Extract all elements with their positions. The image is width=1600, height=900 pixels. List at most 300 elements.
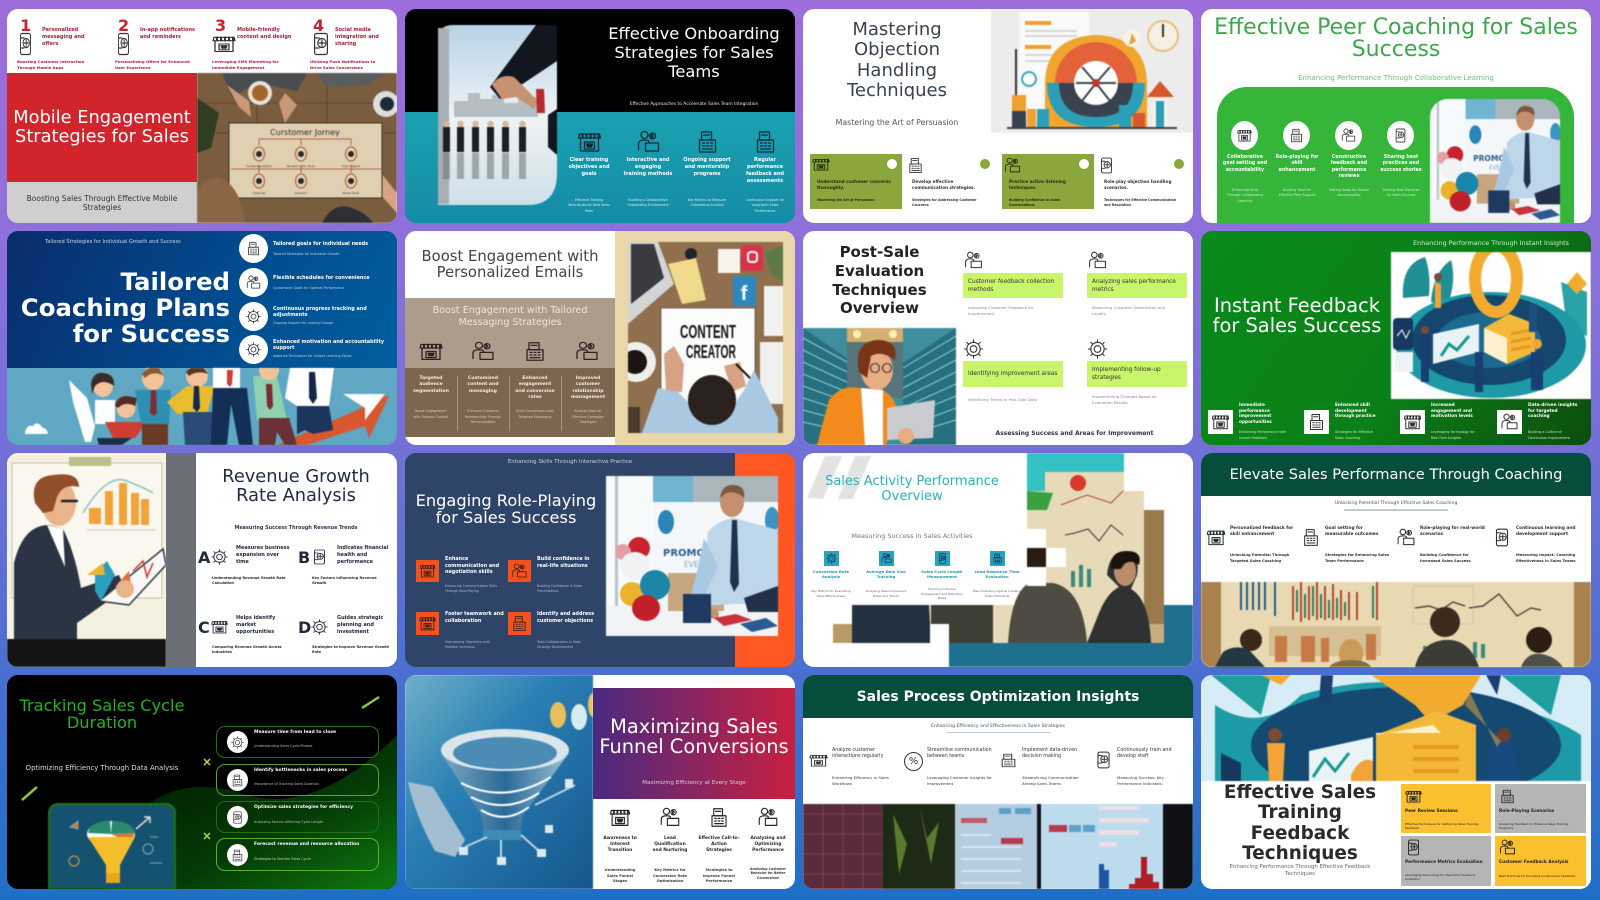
photo: customer journey board on table: Curstomer Jorney (270, 128, 340, 137)
item: foster teamwork: collaboration (445, 618, 481, 624)
photo: hand placing figure on businessmen (437, 24, 558, 206)
icon row (419, 342, 598, 361)
item: goal setting: Strategies for Enhancing Sales (1325, 553, 1389, 557)
item: constructive feedback: reviews (1339, 174, 1359, 179)
item: continuous learning: development support (1516, 532, 1568, 537)
item: identify objections: Team Collaboration in Sales (537, 640, 581, 644)
column: enhanced engagement: and conversion (515, 389, 555, 394)
item: streamline communication: % (909, 756, 918, 767)
panel: Sales Process Optimization Insights (803, 675, 1193, 889)
item: constructive feedback: performance (1332, 168, 1366, 173)
item: continuous learning: Continuous learning and (1516, 526, 1575, 531)
item: interactive training methods: Interactive and (626, 157, 670, 163)
item 1: personalized messaging: offers (42, 41, 58, 47)
item C (198, 615, 296, 660)
title (21, 267, 230, 348)
subtitle: Enhancing Efficiency and Effectiveness in Sales Strategies (931, 724, 1065, 728)
item 2: in-app notifications: and reminders (140, 34, 181, 40)
item: tailored goals: Tailored Strategies for Individual Growth (273, 252, 339, 256)
column: improved relationship management: Strategies (580, 420, 596, 424)
item: role-playing scenarios: Role-playing for real-world (1420, 526, 1485, 531)
item 1: personalized messaging: 1 (20, 16, 31, 35)
panel: Instant Feedback (1201, 231, 1591, 445)
item: continuously train staff: Measuring Success: Key (1117, 775, 1164, 780)
row: identify bottlenecks: Importance of Tracking Sales Duration (254, 782, 319, 786)
item: clear training objectives: Effective Training (575, 198, 603, 202)
item: lead qualification: Optimization (657, 879, 683, 883)
panel: Boost Engagement with Personalized Emails (405, 231, 795, 445)
title: for Sales Success (436, 508, 576, 527)
title: Boost Engagement with (422, 248, 598, 264)
item: build confidence (508, 555, 598, 599)
item: ongoing support: programs (693, 171, 721, 177)
item: flexible schedules: Flexible schedules for convenience (273, 275, 370, 281)
subtitle band (7, 182, 197, 223)
item: identify objections: Identify and address (537, 611, 594, 617)
item 1: personalized messaging (17, 16, 85, 70)
item: interactive training methods: training methods (624, 171, 672, 177)
title banner: Strategies for Sales (15, 126, 189, 147)
subtitle: Techniques (1285, 871, 1315, 877)
block: implementing follow-up: Evaluation Results (1092, 400, 1128, 405)
tile: peer review sessions: Peer Review Sessions (1405, 809, 1458, 814)
item 4: social media integration: sharing (335, 41, 356, 47)
item: identify objections: Strategy Development (537, 645, 573, 649)
gradient title panel: Funnel Conversions (599, 735, 789, 758)
column: enhanced engagement: Targeted Messaging (519, 414, 551, 418)
cream frame (615, 231, 795, 445)
item: conversion rate analysis (804, 551, 858, 601)
tile: customer feedback analysis: Customer Feedback Analysis (1499, 860, 1568, 865)
card: develop communication strategies: Develop effective (912, 179, 953, 184)
item 2: in-app notifications (115, 16, 195, 70)
header with title (1201, 453, 1591, 496)
item: effective call-to-action: Improve Funnel (703, 874, 735, 878)
title: Instant Feedback (1214, 294, 1380, 317)
item: constructive feedback: Accountability (1337, 193, 1361, 197)
item: effective call-to-action: Action (711, 842, 727, 847)
panel: Revenue Growth Rate Analysis (7, 453, 397, 667)
item B: health and (337, 552, 367, 558)
item: awareness to interest: Sales Funnel (607, 874, 633, 878)
item: ongoing support (683, 131, 731, 207)
photo: dashboard screens (803, 804, 1193, 889)
item: average deal size: Rates and Trends (873, 594, 899, 598)
item: enhance communication: Enhancing Communication Skills (445, 584, 497, 588)
card: understand customer concerns: Understand customer concerns (817, 179, 891, 184)
item: lead qualification: Qualification (654, 842, 686, 847)
card: practice active listening: Practice active listening (1009, 179, 1066, 184)
tile: role-playing scenarios: Role-Playing Scenarios (1499, 809, 1554, 814)
item: enhanced skill development (1304, 403, 1398, 443)
item: regular performance feedback: Continuous Support for (746, 198, 784, 202)
card: develop communication strategies: communication strategies. (912, 185, 975, 190)
panel: Mastering Objection Handling (803, 9, 1193, 223)
item: constructive feedback (1329, 121, 1369, 197)
item: conversion rate analysis: Analysis (822, 574, 840, 579)
item: sharing best practices: success stories (1380, 168, 1422, 173)
card: practice active listening: Conversations (1009, 203, 1035, 207)
item: clear training objectives: Clear training (570, 157, 608, 163)
column: enhanced engagement (515, 376, 555, 418)
green glow background (7, 675, 397, 889)
item: constructive feedback: Setting Goals for Mutual (1329, 188, 1369, 192)
item: average deal size: Tracking (877, 574, 895, 579)
card: develop communication strategies: Strategies for Addressing Customer (912, 198, 977, 202)
title: Duration (67, 712, 137, 732)
column: customized content (464, 376, 502, 424)
item: continuously train staff: Performance Indicators (1117, 781, 1162, 786)
blue header area (7, 231, 397, 368)
item: clear training objectives: Techniques for New Sales (568, 203, 610, 207)
item: clear training objectives (568, 133, 610, 213)
item D: D (298, 618, 311, 637)
title: Techniques (1242, 843, 1358, 864)
title: Strategies for Sales (614, 43, 774, 62)
item B: Indicates financial (337, 545, 389, 551)
item: clear training objectives: objectives and (568, 164, 610, 170)
item: role-playing (1275, 121, 1319, 197)
block: customer feedback collection (963, 252, 1063, 316)
item: role-playing scenarios: scenarios (1420, 532, 1443, 537)
tile: performance metrics (1401, 836, 1491, 886)
photo: content creator desk (627, 241, 784, 434)
item B: performance (337, 559, 373, 565)
illustration: isometric feedback platform (1391, 252, 1591, 399)
item C: Comparing Revenue Growth Across (212, 645, 282, 649)
item: analyze customer interactions (809, 748, 901, 790)
photo: content creator desk: CONTENT (680, 322, 736, 342)
title (846, 18, 947, 101)
item: enhanced skill development: Enhanced skill (1335, 403, 1370, 408)
item: enhanced motivation: Enhanced motivation and accountability (273, 339, 384, 345)
item: identify objections (508, 610, 598, 654)
block: identifying improvement areas (963, 339, 1063, 402)
item: goal setting: Team Performance (1325, 559, 1364, 563)
item: sales cycle length: Tracking Customer (928, 587, 956, 591)
photo: content creator desk: f (741, 283, 748, 305)
item: awareness to interest: Interest (610, 842, 630, 847)
item: role-playing scenarios: Building Confidence for (1420, 553, 1469, 557)
illustration: cheering business team on arrow (24, 367, 390, 445)
item: foster teamwork: Foster teamwork and (445, 611, 504, 617)
panel: Effective Sales Training Feedback (1201, 675, 1591, 889)
card: develop communication strategies (906, 154, 996, 209)
title: Techniques (847, 80, 947, 101)
column: targeted segmentation: audience (419, 382, 443, 387)
column: enhanced engagement: engagement (519, 382, 551, 387)
column: improved relationship management: management (571, 395, 605, 400)
item: regular performance feedback: Performance (755, 209, 775, 213)
item: data-driven insights: Continuous Improvement (1528, 436, 1570, 440)
title: Coaching Plans (21, 293, 230, 322)
item: foster teamwork: Overcoming Objections with (445, 640, 490, 644)
item: role-playing: enhancement (1279, 168, 1315, 173)
item A: Measures business (236, 545, 290, 551)
item: role-playing scenarios (1396, 526, 1488, 568)
card: role-play objection handling: Role-play objection handling (1104, 179, 1171, 184)
item: effective call-to-action: Strategies (706, 848, 732, 853)
item C: Helps identify (236, 615, 275, 621)
item: continuous progress tracking: Continuous progress tracking and (273, 306, 367, 312)
item: immediate improvement: improvement (1239, 414, 1271, 419)
title: for Success (73, 319, 230, 348)
item: conversion rate analysis: Conversion Rate (813, 569, 849, 574)
item: role-playing: Role-playing for (1275, 155, 1319, 160)
title: Tracking Sales Cycle (19, 696, 184, 714)
item: lead qualification: Key Metrics for (654, 868, 686, 872)
item: sales cycle length (915, 551, 969, 601)
item: interactive training methods: Onboarding Environment (627, 203, 669, 207)
item: immediate improvement: Immediate (1239, 403, 1265, 408)
item: enhance communication (416, 555, 506, 599)
item: enhance communication: communication and (445, 563, 499, 569)
item A: Calculation (212, 581, 234, 585)
card: role-play objection handling (1097, 154, 1190, 209)
item: role-playing: Effective Peer Support (1279, 193, 1315, 197)
item: personalized feedback: Unlocking Potential Through (1230, 553, 1289, 557)
subtitle: Enhancing Performance Through Collaborative Learning (1298, 74, 1494, 82)
panel: Post-Sale Evaluation (803, 231, 1193, 445)
item: lead qualification: Lead (664, 836, 676, 841)
tile: role-playing scenarios: Programs (1499, 826, 1513, 830)
photo: team looking at chart wall (1201, 582, 1591, 667)
title: Engaging Role-Playing (416, 491, 596, 510)
item D (298, 615, 396, 660)
panel: Effective Peer Coaching (1201, 9, 1591, 223)
item C: opportunities (236, 629, 274, 635)
card: practice active listening (1002, 154, 1094, 209)
title (1214, 15, 1578, 62)
item A: A (198, 548, 210, 567)
item 2: in-app notifications: User Experience (115, 65, 151, 70)
item: clear training objectives: Reps (585, 209, 593, 213)
card: develop communication strategies: Concerns (912, 203, 929, 207)
gradient title panel (593, 688, 795, 799)
row: forecast revenue: Forecast revenue and resource allocation (254, 842, 359, 847)
item: enhanced motivation: Adaptive Techniques for Unique Learning Styles (273, 354, 352, 358)
photo: man with promo balloons (606, 476, 778, 636)
title: Overview (881, 489, 943, 504)
item: build confidence: Building Confidence in Sales (537, 584, 582, 588)
item: collaborative goal setting: goal setting and (1223, 161, 1267, 166)
item: continuous learning (1492, 526, 1588, 568)
item: enhanced skill development: development (1335, 409, 1367, 414)
item: effective call-to-action: Effective Call-to- (698, 836, 740, 841)
item 3: mobile-friendly content: 3 (215, 16, 226, 35)
title: Revenue Growth (222, 466, 370, 487)
item B: B (298, 548, 310, 567)
column: customized content: Relationships Through (465, 414, 501, 418)
item: flexible schedules: Customized Goals for Optimal Performance (273, 286, 344, 290)
item A: Understanding Revenue Growth Rate (212, 576, 286, 580)
subtitle: Measuring Success in Sales Activities (851, 532, 973, 540)
panel: Tracking Sales Cycle Duration (7, 675, 397, 889)
item D: investment (337, 629, 369, 635)
item: streamline communication: Improvement (927, 781, 953, 786)
tile: peer review sessions (1401, 784, 1491, 833)
column: improved relationship management: customer (576, 382, 600, 387)
item: increased engagement: Leveraging Technology for (1431, 430, 1474, 434)
item B: Key Factors Influencing Revenue (312, 576, 377, 580)
photo: customer journey board on table: Gearing (253, 191, 265, 195)
photo: smiling man with laptop in store aisle (803, 327, 957, 445)
item: continuously train staff: develop staff (1117, 754, 1148, 759)
item 3: mobile-friendly content: Leveraging SMS Marketing for (212, 59, 279, 64)
item: analyzing and optimizing: Conversions (757, 876, 779, 880)
item: average deal size (859, 551, 913, 601)
item: increased engagement (1400, 403, 1494, 443)
title: Objection (854, 39, 940, 60)
column: customized content: Enhance Customer (467, 409, 499, 413)
item: constructive feedback: feedback and (1331, 161, 1367, 166)
row: identify bottlenecks (216, 764, 379, 796)
item: analyzing and optimizing: Analyzing Customer (750, 867, 786, 871)
item: clear training objectives: goals (581, 171, 597, 177)
panel: Sales Activity Performance (803, 453, 1193, 667)
item: sharing best practices: Sharing Best Practices (1383, 188, 1419, 192)
column: enhanced engagement: Enhanced (522, 376, 548, 381)
item: increased engagement: motivation levels (1431, 414, 1473, 419)
row: forecast revenue: Strategies to Shorten Sales Cycle (254, 857, 311, 861)
column: improved relationship management (571, 376, 605, 424)
item: role-playing scenarios: Increased Sales Success (1420, 559, 1471, 563)
panel: Effective Onboarding Strategies (405, 9, 795, 223)
item: sales cycle length: Rates (938, 596, 946, 600)
item: flexible schedules (239, 268, 370, 297)
header with title (803, 675, 1193, 718)
column: customized content: content and (467, 382, 499, 387)
item D: planning and (337, 622, 374, 628)
tile: performance metrics: Performance Metrics Evaluation (1405, 860, 1483, 865)
title: Tailored (121, 267, 230, 296)
item C: Industries (212, 650, 232, 654)
gray stripe (166, 453, 196, 667)
column: customized content: Customized (468, 376, 498, 381)
item: streamline communication (904, 748, 996, 790)
item: goal setting: measurable outcomes (1325, 532, 1378, 537)
title (406, 493, 606, 526)
item 3: mobile-friendly content (212, 16, 292, 70)
item C: C (198, 618, 210, 637)
item: analyzing and optimizing: Analyzing and (751, 836, 785, 841)
title (832, 243, 927, 317)
item: foster teamwork: Realistic Scenarios (445, 645, 475, 649)
block: identifying improvement areas: Identifying Trends in Post-Sale Data (968, 397, 1037, 402)
item: goal setting: Goal setting for (1325, 526, 1363, 531)
card: role-play objection handling: scenarios. (1104, 185, 1128, 190)
item: regular performance feedback: performance (747, 164, 783, 170)
title: Effective Peer Coaching for Sales (1214, 15, 1578, 40)
tile: role-playing scenarios: Analyzing Feedback to Enhance Sales Training (1499, 822, 1568, 826)
row: optimize strategies: Analyzing Factors Affecting Cycle Length (254, 820, 323, 824)
item: analyze customer interactions: interactions regularly (832, 754, 883, 759)
row: forecast revenue (216, 838, 379, 871)
item: build confidence: Presentations (537, 589, 559, 593)
item: sharing best practices: Sharing best (1384, 155, 1418, 160)
title: Teams (668, 62, 720, 81)
item: conversion rate analysis: Sales Effectiveness (817, 594, 845, 598)
block: analyzing sales metrics: Loyalty (1092, 311, 1106, 316)
item: analyze customer interactions: Workflows (832, 781, 852, 786)
item 1: personalized messaging: messaging and (42, 34, 85, 40)
item: personalized feedback: Personalized feedback for (1230, 526, 1293, 531)
block: analyzing sales metrics: Analyzing sales performance (1092, 279, 1176, 285)
item: role-playing: skill (1292, 161, 1302, 166)
photo: customer journey board on table: Buesion | Pin done (287, 164, 315, 168)
title (803, 474, 1021, 504)
item: lead response time (970, 551, 1024, 601)
orange strip (735, 453, 795, 667)
block: implementing follow-up: Implementing follow-up (1092, 367, 1161, 373)
item: conversion rate analysis: Key Metrics for Evaluating (811, 589, 851, 593)
tile: customer feedback analysis (1495, 836, 1586, 886)
item A: time (236, 559, 249, 565)
item: increased engagement: Increased (1431, 403, 1455, 408)
item: lead response time: Benchmarking Against Industry (973, 589, 1021, 593)
subtitle: Enhancing Performance Through Effective Feedback (1230, 864, 1370, 870)
item: implement data-driven decisions (999, 748, 1091, 790)
tile: customer feedback analysis: Best Practices for Providing Constructive Feedback (1499, 874, 1575, 878)
item: lead qualification (645, 807, 695, 887)
header with title: Sales Process Optimization Insights (857, 689, 1139, 705)
row: optimize strategies: Optimize sales strategies for efficiency (254, 805, 353, 810)
item: interactive training methods (624, 130, 672, 207)
item: personalized feedback: skill enhancement (1230, 532, 1274, 537)
item: continuous learning: Measuring Impact: Coaching (1516, 553, 1575, 557)
subtitle: Enhancing Performance Through Instant Insights (1413, 239, 1569, 247)
item: lead response time: Evaluation (985, 574, 1009, 579)
title: Sales Activity Performance (825, 474, 999, 488)
item: lead response time: Sales Standards (985, 594, 1009, 598)
item: immediate improvement: Enhancing Performance with (1239, 430, 1286, 434)
item: analyzing and optimizing: Optimizing (755, 842, 781, 847)
title (7, 696, 197, 730)
item 4: social media integration: Utilizing Push Notifications to (310, 59, 375, 64)
item: analyzing and optimizing: Behavior for Better (751, 871, 785, 875)
column: improved relationship management: Analyze Data for (574, 409, 602, 413)
card: understand customer concerns (810, 154, 902, 209)
item: enhance communication: Through Role-Playing (445, 589, 479, 593)
item: sales cycle length: Measurement (927, 574, 957, 579)
item: sales cycle length: Sales Cycle Length (921, 569, 963, 574)
title: Training (1258, 802, 1342, 823)
item: regular performance feedback: Regular (754, 157, 776, 163)
item: ongoing support: Key Metrics to Measure (688, 198, 726, 202)
item: effective call-to-action: Performance (706, 879, 732, 883)
item: increased engagement: engagement and (1431, 409, 1472, 414)
subtitle band: Strategies (83, 203, 121, 212)
row: optimize strategies (216, 801, 379, 833)
item: regular performance feedback: feedback and (746, 171, 784, 177)
footer caption: Assessing Success and Areas for Improvement (996, 430, 1153, 437)
item: collaborative goal setting: accountability (1226, 168, 1264, 173)
item: ongoing support: Ongoing support (683, 157, 731, 163)
block: customer feedback collection: methods (968, 287, 993, 293)
item: immediate improvement (1208, 403, 1302, 443)
column: improved relationship management: Improved (576, 376, 600, 381)
brown panel with four columns (405, 368, 615, 437)
row: measure time (216, 726, 379, 758)
item: enhance communication: negotiation skills (445, 569, 493, 575)
item: enhanced motivation (239, 335, 384, 364)
title: Rate Analysis (236, 485, 356, 506)
item: sharing best practices: practices and (1383, 161, 1419, 166)
item 3: mobile-friendly content: Immediate Engagement (212, 65, 264, 70)
item: continuous learning: Effectiveness in Sales Teams (1516, 559, 1576, 563)
column: targeted segmentation: with Tailored Content (414, 414, 448, 418)
item: continuous progress tracking: adjustments (273, 312, 307, 318)
